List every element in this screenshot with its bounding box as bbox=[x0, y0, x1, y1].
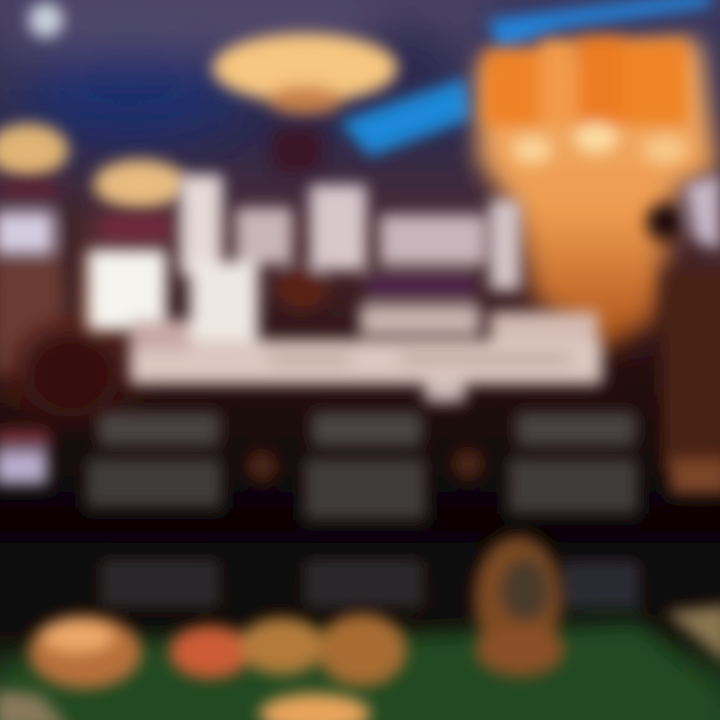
panel: centre bbox=[304, 412, 426, 520]
food items bbox=[29, 614, 406, 720]
dark lamp stem bbox=[272, 128, 322, 172]
panel separators: icons bbox=[246, 448, 484, 482]
floor: green bbox=[0, 620, 720, 720]
title dark accents bbox=[270, 266, 570, 363]
title line one bbox=[180, 175, 520, 290]
fist knuckles bbox=[484, 36, 688, 164]
panel: right bbox=[508, 412, 638, 514]
left wall stripes bbox=[0, 180, 170, 484]
fist: orange bbox=[478, 36, 718, 350]
title line two bbox=[88, 250, 602, 402]
floor path: left bbox=[0, 690, 70, 720]
food: right bbox=[318, 614, 406, 686]
food: left bbox=[29, 616, 141, 688]
ceiling lamp: centre bbox=[213, 34, 397, 114]
ceiling light: spot bbox=[29, 3, 63, 37]
left lamps bbox=[0, 124, 186, 208]
dog figure bbox=[474, 536, 564, 676]
title block bbox=[88, 175, 602, 402]
blue streak bbox=[340, 0, 710, 156]
panel row: upper bbox=[86, 412, 638, 520]
panel row: lower bbox=[100, 558, 640, 610]
food: middle bbox=[170, 618, 324, 678]
ceiling bbox=[0, 0, 480, 390]
food: bottom bbox=[260, 694, 370, 720]
dark figure: left bbox=[18, 327, 122, 417]
floor path: right bbox=[665, 605, 720, 665]
right edge figure bbox=[646, 175, 720, 494]
panel: left bbox=[86, 412, 222, 508]
